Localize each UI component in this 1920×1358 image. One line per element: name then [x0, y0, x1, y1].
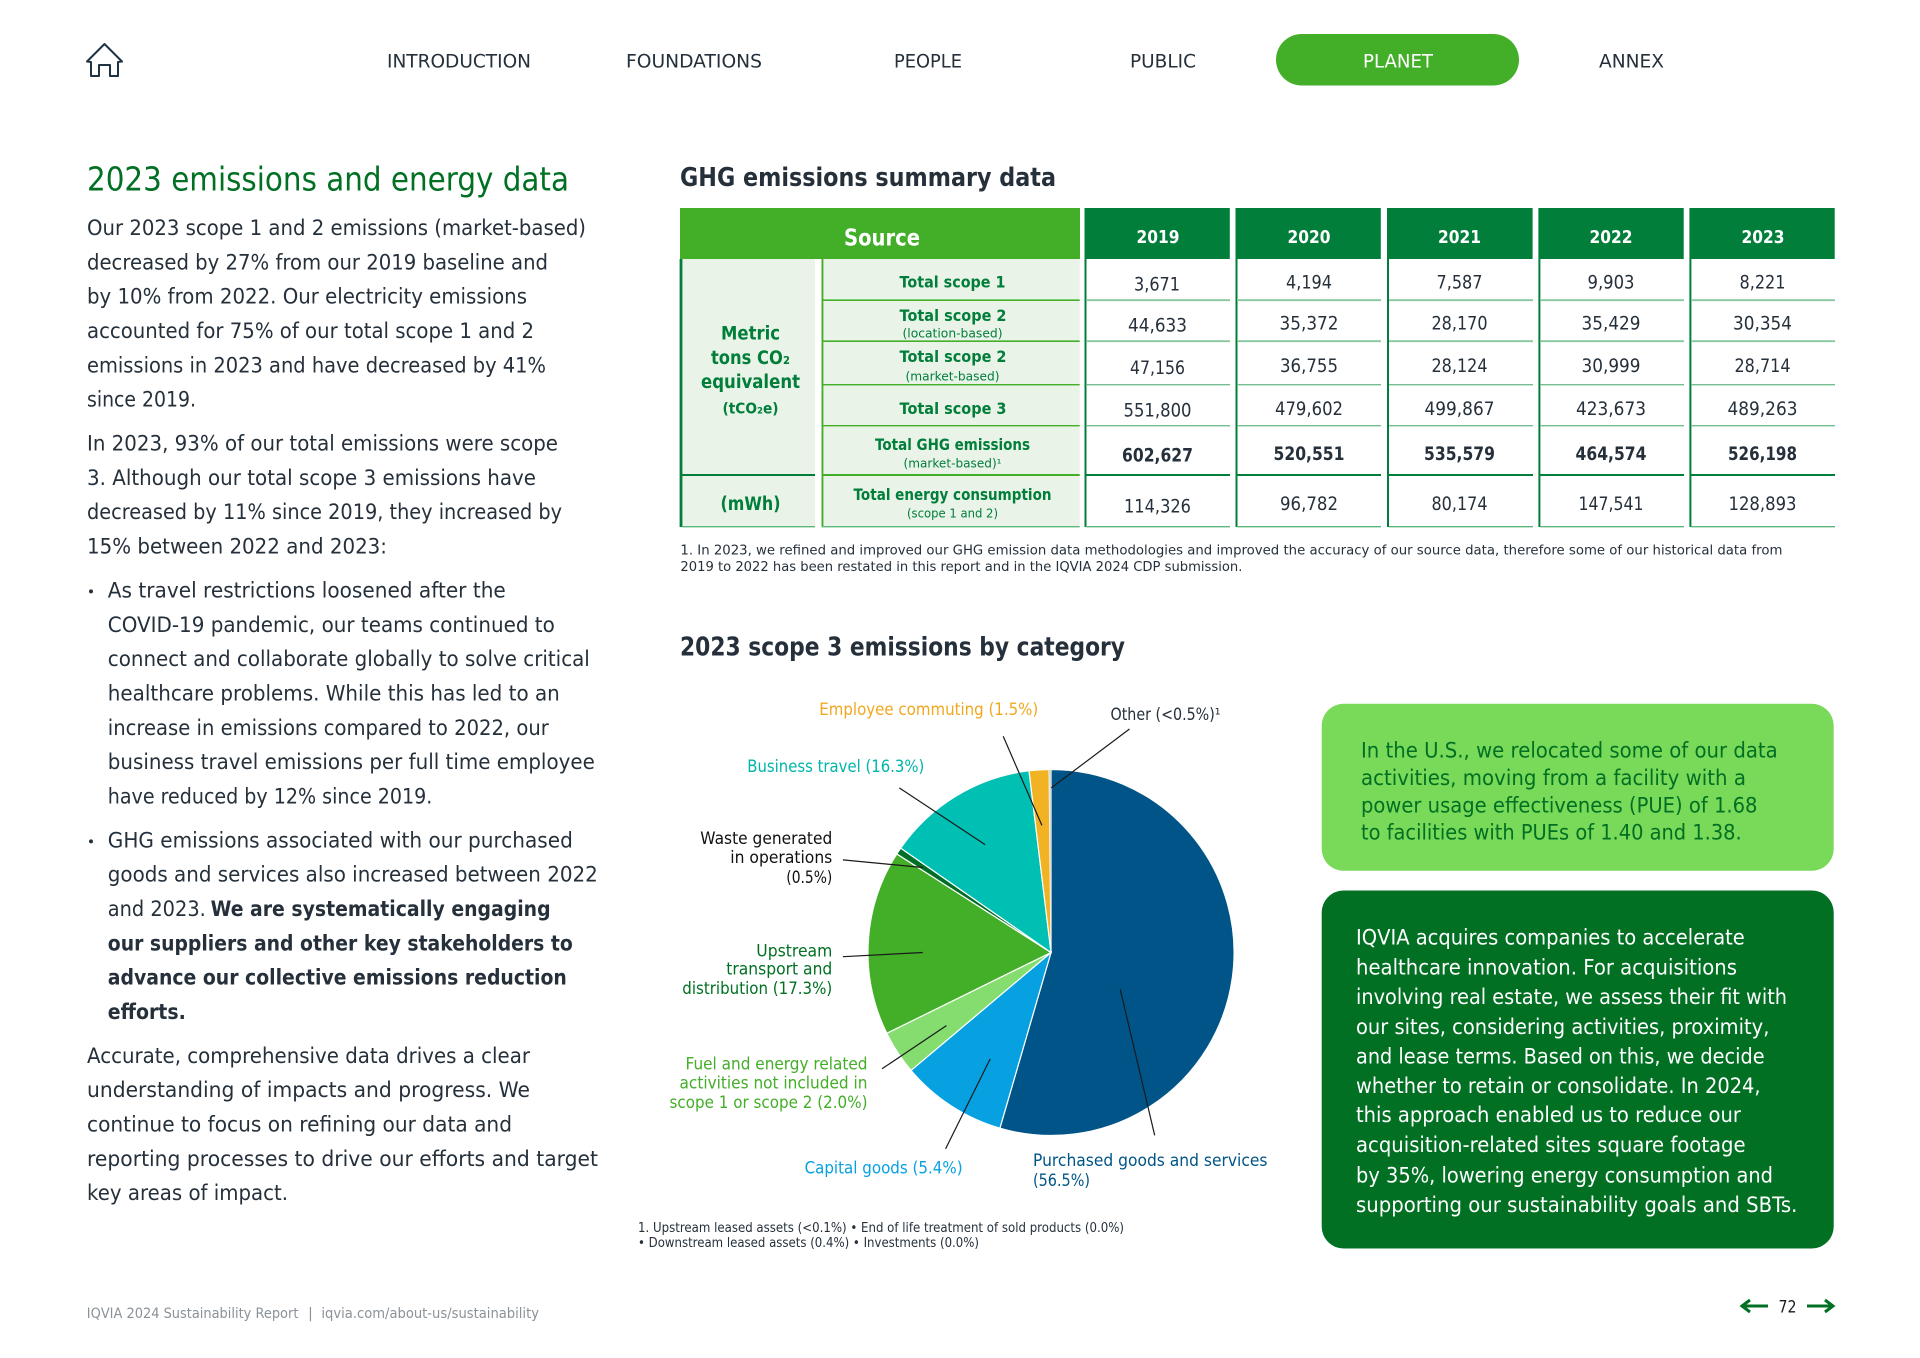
label: other: Other (<0.5%)¹	[1110, 705, 1220, 724]
bullet: purchased goods: efforts.	[108, 1000, 186, 1025]
table data: 2020	[1274, 272, 1344, 515]
bullet: purchased goods: We are systematically engaging	[211, 897, 551, 922]
table header: years: 2023	[1742, 227, 1784, 248]
table data: 2020: 520,551	[1274, 443, 1344, 465]
heading: GHG emissions summary: GHG emissions summary data	[680, 163, 1056, 193]
table data: 2020: 4,194	[1286, 271, 1332, 293]
pie leader lines	[843, 729, 1155, 1149]
label: upstream transport: Upstream	[756, 941, 832, 960]
label: purchased goods: (56.5%)	[1033, 1171, 1090, 1190]
label: upstream transport: transport and	[726, 960, 832, 979]
bullet: travel: connect and collaborate globally to solve critical	[108, 647, 590, 672]
paragraph: scope 3	[87, 432, 562, 560]
table data: 2022: 30,999	[1582, 355, 1640, 377]
label: capital goods: Capital goods (5.4%)	[805, 1159, 963, 1178]
paragraph: intro: by 10% from 2022. Our electricity emissions	[87, 285, 527, 310]
paragraph: scope 3: decreased by 11% since 2019, they increased by	[87, 500, 562, 525]
nav item: people: PEOPLE	[894, 52, 962, 72]
table row labels: Total energy consumption	[854, 485, 1052, 504]
heading: scope 3 by category: 2023 scope 3 emissions by category	[680, 632, 1125, 662]
label: waste generated	[700, 829, 832, 887]
pie footnote	[638, 1221, 1124, 1251]
table unit column: (tCO₂e)	[722, 399, 778, 417]
table data: 2020: 35,372	[1280, 312, 1338, 334]
table data: 2019: 114,326	[1124, 495, 1191, 517]
label: upstream transport: distribution (17.3%)	[682, 979, 832, 998]
table data: 2023: 30,354	[1733, 312, 1792, 334]
table header: years	[1084, 208, 1835, 259]
callout: acquisitions	[1322, 890, 1834, 1248]
table unit column: equivalent	[701, 372, 800, 393]
label: purchased goods: Purchased goods and services	[1033, 1151, 1268, 1170]
table row labels: (market-based)¹	[904, 457, 1002, 471]
paragraph: scope 3: 15% between 2022 and 2023:	[87, 534, 387, 559]
footer text: IQVIA 2024 Sustainability Report	[87, 1306, 299, 1322]
callout: data relocation: to facilities with PUEs of 1.40 and 1.38.	[1361, 821, 1742, 846]
table unit column: Metric	[721, 324, 780, 345]
table data: 2020: 479,602	[1275, 398, 1343, 420]
table row labels: Total GHG emissions	[875, 435, 1030, 454]
table unit column	[680, 259, 815, 527]
callout: acquisitions: this approach enabled us to reduce our	[1356, 1103, 1741, 1128]
callout: acquisitions: supporting our sustainability goals and SBTs.	[1356, 1193, 1797, 1218]
paragraph: intro: since 2019.	[87, 388, 196, 413]
arrow: next	[1807, 1300, 1833, 1312]
bullet: purchased goods: GHG emissions associated with our purchased	[108, 828, 573, 853]
paragraph: closing: key areas of impact.	[87, 1181, 288, 1206]
table data: 2023: 8,221	[1740, 271, 1786, 293]
table data: 2023	[1728, 272, 1798, 515]
table row labels: Total scope 3	[900, 399, 1006, 418]
callout: acquisitions: healthcare innovation. For acquisitions	[1356, 955, 1737, 980]
table row labels: Total scope 2	[900, 306, 1006, 325]
bullet: travel: business travel emissions per full time employee	[108, 750, 595, 775]
table data: 2023: 489,263	[1728, 398, 1798, 420]
table data: 2023: 128,893	[1728, 493, 1796, 515]
nav item: annex: ANNEX	[1599, 52, 1664, 72]
table data: 2021: 7,587	[1436, 271, 1482, 293]
table data: 2021	[1424, 272, 1495, 515]
callout: acquisitions: acquisition-related sites square footage	[1356, 1133, 1746, 1158]
label: fuel and energy: Fuel and energy related	[686, 1055, 868, 1074]
pagination	[1742, 1298, 1833, 1318]
bullet: purchased goods	[89, 828, 598, 1025]
footer text: |	[308, 1306, 313, 1322]
table header: years: 2022	[1590, 227, 1632, 248]
label: waste generated: Waste generated	[700, 829, 832, 848]
paragraph: closing: Accurate, comprehensive data drives a clear	[87, 1044, 530, 1069]
table data: 2022	[1576, 272, 1646, 515]
paragraph: intro	[87, 216, 586, 413]
pie footnote: 1. Upstream leased assets (<0.1%) • End of life treatment of sold products (0.0%)	[638, 1221, 1124, 1236]
nav item: foundations: FOUNDATIONS	[626, 52, 762, 72]
table header: source	[680, 208, 1080, 259]
table data: 2019: 551,800	[1124, 399, 1192, 421]
table footnote: 1. In 2023, we refined and improved our GHG emission data methodologies and improved the accuracy of our source data, therefore some of our historical data from	[680, 542, 1782, 558]
label: employee commuting: Employee commuting (1.5%)	[819, 700, 1038, 719]
nav item: public: PUBLIC	[1130, 52, 1196, 72]
table data: 2021: 28,124	[1432, 355, 1488, 377]
callout: data relocation	[1322, 704, 1834, 871]
table data: 2019: 3,671	[1134, 273, 1180, 295]
table unit column: tons CO₂	[711, 348, 790, 369]
paragraph: closing: reporting processes to drive our efforts and target	[87, 1147, 598, 1172]
paragraph: intro: accounted for 75% of our total scope 1 and 2	[87, 319, 534, 344]
table header: years: 2019	[1136, 227, 1180, 248]
paragraph: intro: decreased by 27% from our 2019 baseline and	[87, 250, 548, 275]
table data: 2022: 147,541	[1578, 493, 1644, 515]
label: fuel and energy: scope 1 or scope 2 (2.0%)	[670, 1093, 868, 1112]
paragraph: scope 3: 3. Although our total scope 3 emissions have	[87, 466, 536, 491]
label: purchased goods	[1033, 1151, 1268, 1190]
callout: acquisitions: our sites, considering activities, proximity,	[1356, 1015, 1769, 1040]
table data: 2019: 47,156	[1130, 357, 1185, 379]
paragraph: intro: emissions in 2023 and have decreased by 41%	[87, 353, 546, 378]
footer text: iqvia.com/about-us/sustainability	[321, 1306, 539, 1322]
pie chart: scope 3 emissions by category	[868, 770, 1234, 1136]
callout: acquisitions: whether to retain or consolidate. In 2024,	[1356, 1074, 1761, 1099]
table data: 2021: 499,867	[1424, 398, 1494, 420]
nav item: introduction: INTRODUCTION	[387, 52, 531, 72]
table data: 2021: 28,170	[1432, 312, 1488, 334]
table rules for year columns	[1086, 259, 1835, 527]
bullet: travel: have reduced by 12% since 2019.	[108, 784, 432, 809]
table data: 2020: 36,755	[1280, 355, 1338, 377]
table row labels: (location-based)	[902, 326, 1002, 340]
nav pill: planet active: PLANET	[1363, 52, 1434, 72]
bullet: travel: COVID-19 pandemic, our teams continued to	[108, 613, 555, 638]
navigation bar	[87, 34, 1664, 86]
bullet: purchased goods: advance our collective emissions reduction	[108, 966, 567, 991]
paragraph: closing: understanding of impacts and progress. We	[87, 1078, 530, 1103]
bullet: travel	[89, 579, 595, 809]
table row labels	[822, 259, 1080, 527]
label: waste generated: in operations	[730, 848, 832, 867]
paragraph: closing: continue to focus on refining our data and	[87, 1112, 512, 1137]
table data: 2022: 35,429	[1582, 312, 1640, 334]
label: business travel: Business travel (16.3%)	[747, 757, 924, 776]
table data: 2020: 96,782	[1280, 493, 1338, 515]
pie footnote: • Downstream leased assets (0.4%) • Investments (0.0%)	[638, 1236, 979, 1251]
table row labels: (market-based)	[906, 369, 1000, 383]
paragraph: scope 3: In 2023, 93% of our total emissions were scope	[87, 432, 558, 457]
callout: acquisitions: and lease terms. Based on this, we decide	[1356, 1044, 1765, 1070]
table header: years: 2021	[1438, 227, 1481, 248]
bullet: purchased goods: our suppliers and other key stakeholders to	[108, 931, 573, 956]
label: waste generated: (0.5%)	[786, 868, 832, 887]
bullet: purchased goods: goods and services also increased between 2022	[108, 863, 598, 888]
title: 2023 emissions and energy data	[87, 160, 569, 198]
table unit column: (mWh)	[720, 494, 780, 515]
icon: home	[87, 44, 122, 76]
table data: 2019: 44,633	[1128, 314, 1187, 336]
table: GHG emissions summary data	[680, 208, 1835, 527]
bullet: travel: healthcare problems. While this has led to an	[108, 681, 560, 706]
footer text	[87, 1306, 539, 1322]
table footnote: 2019 to 2022 has been restated in this report and in the IQVIA 2024 CDP submission.	[680, 559, 1242, 575]
bullet: purchased goods: and 2023.	[108, 897, 206, 922]
callout: data relocation: activities, moving from a facility with a	[1361, 766, 1746, 791]
left column text	[87, 160, 598, 1206]
callout: data relocation: In the U.S., we relocated some of our data	[1361, 738, 1778, 764]
label: upstream transport	[682, 941, 832, 998]
callout: acquisitions: involving real estate, we assess their fit with	[1356, 985, 1787, 1010]
bullet: travel: As travel restrictions loosened after the	[108, 579, 506, 604]
callout: acquisitions: by 35%, lowering energy consumption and	[1356, 1163, 1773, 1188]
arrow: previous	[1742, 1300, 1768, 1312]
table row labels: (scope 1 and 2)	[907, 507, 998, 521]
table data: 2022: 464,574	[1576, 443, 1646, 465]
table header: years: 2020	[1288, 227, 1330, 248]
label: fuel and energy	[670, 1055, 868, 1112]
paragraph: closing	[87, 1044, 598, 1206]
table data: 2021: 535,579	[1424, 443, 1495, 465]
table header: source: Source	[844, 226, 920, 252]
table data: 2022: 9,903	[1588, 271, 1634, 293]
table row labels: Total scope 1	[900, 272, 1006, 292]
callout: data relocation: power usage effectiveness (PUE) of 1.68	[1361, 793, 1758, 818]
bullet: travel: increase in emissions compared to 2022, our	[108, 716, 549, 741]
table footnote	[680, 542, 1782, 575]
table row labels: Total scope 2	[900, 347, 1006, 366]
callout: acquisitions: IQVIA acquires companies to accelerate	[1356, 926, 1745, 951]
table data: 2021: 80,174	[1432, 493, 1488, 515]
table data: 2023: 28,714	[1734, 355, 1790, 377]
nav pill: planet active	[1276, 34, 1519, 86]
table data: 2023: 526,198	[1728, 443, 1797, 465]
table data: 2019	[1122, 273, 1193, 517]
page number: 72	[1778, 1298, 1796, 1318]
table data: 2019: 602,627	[1122, 444, 1193, 466]
paragraph: intro: Our 2023 scope 1 and 2 emissions (market-based)	[87, 216, 586, 241]
label: fuel and energy: activities not included in	[680, 1074, 868, 1093]
table data: 2022: 423,673	[1576, 398, 1646, 420]
